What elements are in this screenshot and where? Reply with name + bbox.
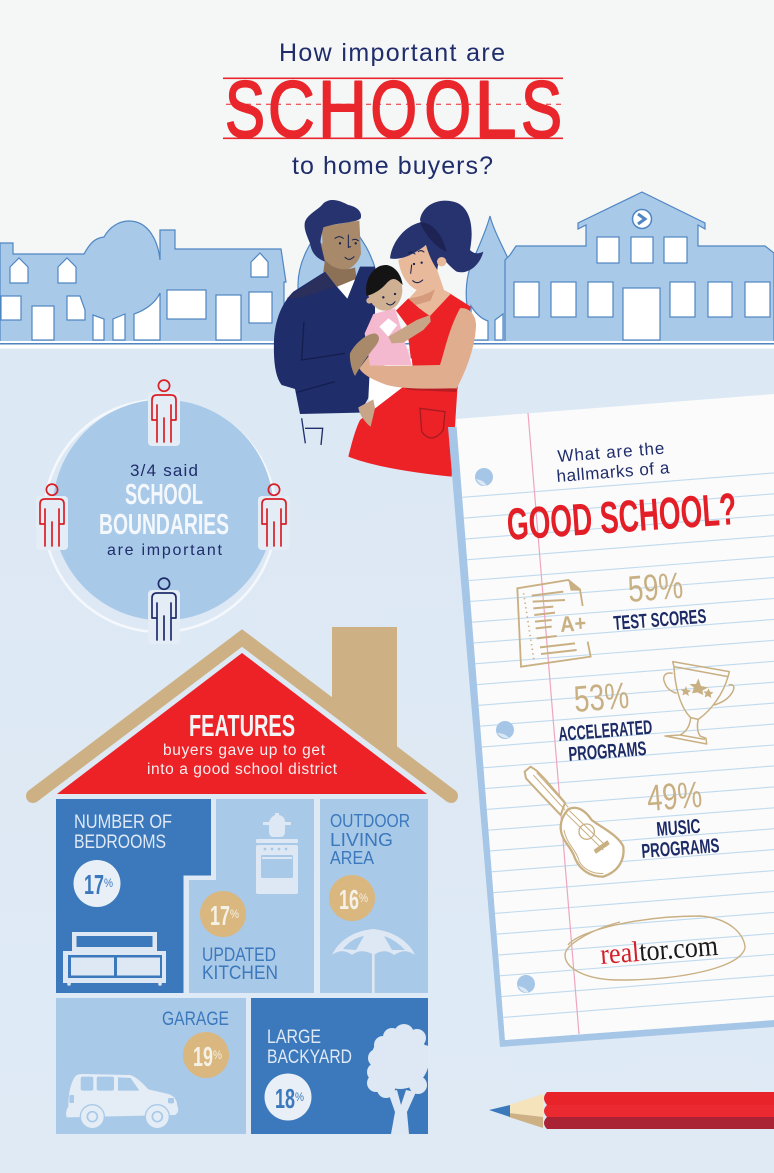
icon: trophy bbox=[664, 662, 734, 744]
room label: LARGE bbox=[267, 1027, 321, 1048]
person icon: bottom bbox=[148, 578, 180, 644]
percent: 59% bbox=[626, 565, 684, 610]
right tree bbox=[466, 216, 512, 343]
paper heading: hallmarks of a bbox=[556, 458, 670, 486]
chest shade bbox=[409, 289, 435, 305]
room label: LIVING bbox=[330, 830, 393, 850]
room label bbox=[74, 812, 172, 853]
sweater shoulder shade bbox=[287, 273, 335, 298]
school clock bbox=[632, 210, 652, 228]
baby bbox=[365, 265, 431, 366]
percent badge: % bbox=[359, 891, 368, 905]
neighbourhood skyline bbox=[0, 192, 774, 349]
title word: schools with handwriting rules: L bbox=[474, 64, 516, 154]
room label bbox=[202, 945, 278, 984]
blue disc bbox=[52, 400, 274, 620]
room label: BACKYARD bbox=[267, 1047, 352, 1068]
pencil bbox=[489, 1092, 774, 1129]
hair overlap bbox=[420, 222, 447, 252]
title line: to home buyers: to home buyers? bbox=[292, 152, 493, 180]
label: MUSIC bbox=[656, 816, 701, 841]
paper heading: What are the bbox=[557, 439, 665, 466]
room: outdoor living area bbox=[320, 799, 428, 993]
man's sweater bbox=[274, 267, 375, 414]
stat text: 3/4 said bbox=[130, 461, 198, 480]
hand-drawn ellipse bbox=[565, 916, 745, 980]
title word: schools with handwriting rules: S bbox=[521, 64, 562, 154]
icon: bed bbox=[63, 932, 166, 986]
gable subheading bbox=[147, 742, 338, 778]
gable subheading: into a good school district bbox=[147, 761, 338, 778]
chimney bbox=[332, 627, 397, 750]
room label: BEDROOMS bbox=[74, 832, 166, 853]
percent badge bbox=[183, 1032, 229, 1078]
pencil wood bbox=[509, 1094, 543, 1117]
label: TEST SCORES bbox=[613, 606, 707, 635]
gable heading: FEATURES bbox=[189, 708, 295, 743]
percent badge: % bbox=[213, 1048, 222, 1062]
woman's arm bbox=[359, 308, 476, 389]
percent: 53% bbox=[572, 675, 630, 720]
percent badge: 17 bbox=[210, 900, 230, 931]
icon: stove and pot bbox=[256, 813, 298, 894]
baby's foot bbox=[358, 399, 375, 427]
baby's head bbox=[368, 269, 402, 311]
room label bbox=[267, 1027, 352, 1068]
left houses and tree bbox=[0, 221, 286, 343]
woman bbox=[348, 201, 483, 477]
notebook paper bbox=[440, 394, 774, 1047]
pencil lead bbox=[489, 1105, 510, 1117]
roof bbox=[33, 638, 451, 796]
room label: GARAGE bbox=[162, 1009, 229, 1030]
stat: music programs: PROGRAMS bbox=[641, 835, 720, 863]
woman's face and neck bbox=[398, 245, 452, 317]
baby's arm bbox=[388, 315, 431, 343]
icon: car bbox=[66, 1074, 178, 1129]
family illustration bbox=[274, 200, 483, 477]
pocket bbox=[420, 408, 445, 438]
stat text: SCHOOL bbox=[125, 479, 203, 511]
stat: accelerated programs: PROGRAMS bbox=[568, 738, 647, 766]
woman's hair front bbox=[390, 222, 446, 270]
man bbox=[274, 200, 375, 445]
paper border bbox=[448, 427, 774, 1047]
ground line bbox=[0, 341, 774, 349]
person icon: left bbox=[36, 484, 68, 550]
room: large backyard bbox=[251, 998, 434, 1134]
roof gable bbox=[57, 653, 427, 794]
percent badge bbox=[264, 1074, 312, 1120]
percent badge: 17 bbox=[84, 869, 104, 900]
icon: graded paper: A+ bbox=[559, 610, 587, 637]
facial features bbox=[335, 235, 424, 305]
man's face bbox=[322, 221, 361, 272]
man's legs outline bbox=[302, 418, 323, 445]
dress waist shade bbox=[403, 387, 457, 392]
title word: schools with handwriting rules: C bbox=[268, 64, 315, 154]
percent: 49% bbox=[645, 774, 703, 819]
windows bbox=[1, 237, 770, 340]
boundary ring bbox=[44, 400, 276, 632]
logo: realtor.com circled bbox=[565, 916, 745, 980]
icon: umbrella bbox=[332, 929, 415, 993]
title word: schools with handwriting rules: O bbox=[424, 64, 471, 154]
percent badge: % bbox=[230, 907, 239, 921]
room: garage bbox=[56, 998, 246, 1134]
room: number of bedrooms bbox=[56, 799, 211, 993]
percent badge bbox=[329, 875, 375, 921]
percent badge: 19 bbox=[193, 1041, 213, 1072]
paper heading bbox=[505, 439, 738, 550]
onesie white patch bbox=[379, 318, 397, 337]
stat text bbox=[99, 461, 229, 559]
title word: schools with handwriting rules bbox=[223, 64, 563, 154]
background: ground bbox=[0, 345, 774, 1173]
person icon: right bbox=[258, 484, 290, 550]
room label: OUTDOOR bbox=[330, 811, 410, 831]
baby's legs and white wrap bbox=[368, 358, 413, 408]
paper sheet bbox=[456, 394, 774, 1040]
pencil body bbox=[544, 1092, 774, 1129]
background: sky bbox=[0, 0, 774, 345]
percent badge bbox=[74, 860, 120, 907]
man's hair bbox=[305, 200, 361, 262]
tree behind the man bbox=[298, 205, 378, 300]
stat: accelerated programs bbox=[558, 662, 734, 766]
icon: guitar bbox=[525, 767, 624, 877]
room label: AREA bbox=[330, 848, 374, 868]
school building bbox=[505, 192, 774, 343]
man's collar bbox=[337, 279, 355, 299]
icon: graded paper bbox=[517, 580, 591, 667]
logo text: realtor.com bbox=[599, 930, 720, 971]
house of features bbox=[33, 627, 451, 1134]
margin line bbox=[528, 413, 579, 1034]
baby's hair bbox=[366, 265, 403, 296]
title word: schools with handwriting rules: O bbox=[370, 64, 417, 154]
label: ACCELERATED bbox=[558, 717, 653, 746]
title bbox=[223, 39, 563, 180]
gable subheading: buyers gave up to get bbox=[163, 742, 326, 759]
percent badge: % bbox=[104, 876, 113, 890]
stat: music programs bbox=[525, 767, 720, 877]
icon: tree bbox=[367, 1024, 434, 1134]
stat circle: school boundaries bbox=[36, 380, 290, 644]
baby's onesie bbox=[365, 308, 412, 366]
percent badge: 16 bbox=[339, 884, 359, 915]
sweater creases bbox=[297, 322, 345, 392]
punched holes bbox=[475, 468, 535, 993]
title word: schools with handwriting rules: H bbox=[318, 64, 367, 154]
ruled lines bbox=[440, 473, 774, 1022]
percent badge: % bbox=[295, 1090, 304, 1104]
stat text: BOUNDARIES bbox=[99, 509, 229, 541]
percent badge: 18 bbox=[275, 1083, 295, 1114]
man's ear bbox=[313, 243, 325, 255]
title word: schools with handwriting rules: S bbox=[225, 64, 265, 154]
ponytail bbox=[420, 201, 483, 272]
baby's ear bbox=[366, 298, 372, 304]
man's neck bbox=[323, 260, 357, 287]
stat: test scores bbox=[517, 565, 707, 667]
percent badge bbox=[200, 891, 246, 937]
room label: KITCHEN bbox=[202, 963, 278, 984]
man's hand on baby bbox=[350, 333, 379, 376]
dress bbox=[348, 294, 471, 477]
room: updated kitchen bbox=[189, 799, 314, 993]
room label: NUMBER OF bbox=[74, 812, 172, 833]
person icon: top bbox=[148, 380, 180, 446]
stat text: are important bbox=[107, 542, 223, 559]
woman's ear bbox=[437, 257, 446, 266]
room label: UPDATED bbox=[202, 945, 276, 966]
room label bbox=[330, 811, 410, 868]
title line: how important are: How important are bbox=[279, 39, 505, 67]
